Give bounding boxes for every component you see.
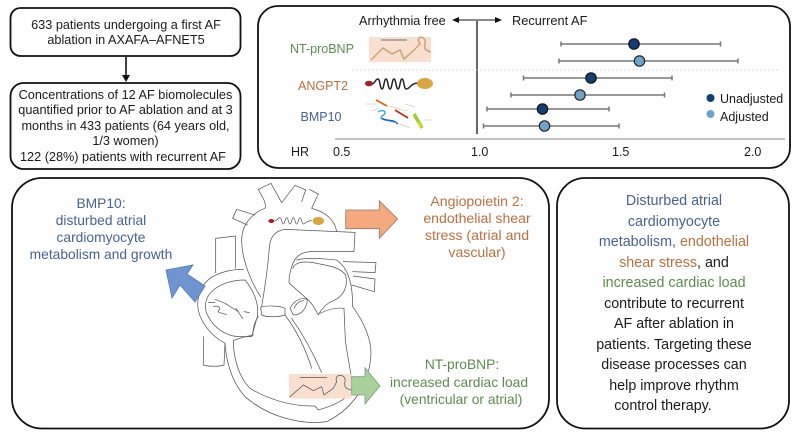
label: NT-proBNP: NT-proBNP xyxy=(290,42,354,56)
axis labels: 2.0 xyxy=(744,145,761,159)
text: BMP10 mechanism: cardiomyocyte xyxy=(57,230,146,245)
text: angiopoietin 2 mechanism: endothelial shear xyxy=(423,210,531,226)
panel: cohort box xyxy=(10,8,240,56)
heading: arrhythmia free: Arrhythmia free xyxy=(359,14,446,28)
text: conclusion: disease processes can xyxy=(601,357,747,373)
text: conclusion: patients. Targeting these xyxy=(596,337,752,353)
forest row: ANGPT2 adjusted xyxy=(511,90,664,100)
panel: biomolecule quantification box: quantified prior to AF ablation and at 3 xyxy=(18,103,233,117)
icon: BMP10 ribbon structure xyxy=(366,100,432,128)
panel: forest plot xyxy=(258,6,790,168)
label: BMP10: BMP10 xyxy=(300,110,342,124)
forest row: BMP10 adjusted xyxy=(484,121,619,131)
axis line xyxy=(335,138,785,140)
text: BMP10 mechanism: disturbed atrial xyxy=(56,213,146,228)
text: NT-proBNP mechanism xyxy=(390,357,528,407)
panel: heart mechanisms xyxy=(12,178,549,428)
axis labels: 1.5 xyxy=(612,145,629,159)
forest row: NT-proBNP adjusted xyxy=(559,56,738,66)
label: ANGPT2: ANGPT2 xyxy=(298,79,348,93)
panel: biomolecule quantification box: 1/3 women) xyxy=(92,134,159,148)
text: angiopoietin 2 mechanism xyxy=(423,193,531,260)
forest row: NT-proBNP unadjusted xyxy=(561,39,720,49)
arrow: double headed direction xyxy=(452,17,502,23)
text: conclusion: Disturbed atrial xyxy=(626,193,722,209)
panel: cohort box: ablation in AXAFA–AFNET5 xyxy=(47,33,205,47)
forest row: BMP10 unadjusted xyxy=(487,104,609,114)
forest row: ANGPT2 unadjusted xyxy=(524,73,672,83)
arrow: cohort to biomolecules xyxy=(122,57,130,82)
text: angiopoietin 2 mechanism: vascular) xyxy=(448,244,506,260)
icon: NT-proBNP peptide xyxy=(369,37,431,62)
text: BMP10 mechanism: metabolism and growth xyxy=(30,247,172,262)
text: BMP10 mechanism xyxy=(30,196,172,262)
text: conclusion: AF after ablation in xyxy=(614,316,734,332)
legend: Unadjusted xyxy=(720,92,783,106)
panel: biomolecule quantification box: 122 (28%) patients with recurrent AF xyxy=(20,150,226,164)
text: conclusion: metabolism, endothelial xyxy=(599,234,749,250)
panel: cohort box: 633 patients undergoing a first AF xyxy=(31,18,221,32)
text: angiopoietin 2 mechanism: Angiopoietin 2: xyxy=(430,193,524,209)
text: conclusion: increased cardiac load xyxy=(602,275,746,291)
text: NT-proBNP mechanism: NT-proBNP: xyxy=(425,357,499,372)
legend: Adjusted xyxy=(720,110,769,124)
text: NT-proBNP mechanism: (ventricular or atrial) xyxy=(400,392,522,407)
text: conclusion: contribute to recurrent xyxy=(604,296,744,312)
panel: biomolecule quantification box xyxy=(10,83,240,169)
text: conclusion: help improve rhythm xyxy=(609,378,739,394)
text: angiopoietin 2 mechanism: stress (atrial and xyxy=(425,227,529,243)
axis labels: 0.5 xyxy=(333,145,350,159)
icon: ANGPT2 molecule on heart xyxy=(268,217,324,225)
icon: NT-proBNP peptide on heart xyxy=(289,374,351,399)
text: BMP10 mechanism: BMP10: xyxy=(76,196,126,211)
panel: biomolecule quantification box: months in 433 patients (64 years old, xyxy=(21,119,230,133)
text: conclusion xyxy=(596,193,752,414)
axis labels xyxy=(291,145,761,159)
axis labels: HR xyxy=(291,145,309,159)
panel: conclusion xyxy=(557,178,789,428)
reference line at HR 1.0 xyxy=(476,21,478,134)
heart diagram xyxy=(198,183,376,422)
arrow: blue to BMP10 text xyxy=(166,265,205,302)
heading: recurrent AF: Recurrent AF xyxy=(512,13,588,28)
text: NT-proBNP mechanism: increased cardiac load xyxy=(390,375,528,390)
panel: biomolecule quantification box: Concentrations of 12 AF biomolecules xyxy=(19,88,232,102)
text: conclusion: cardiomyocyte xyxy=(628,214,720,230)
icon: ANGPT2 molecule xyxy=(365,78,433,89)
text: conclusion: control therapy. xyxy=(614,398,712,414)
text: conclusion: shear stress, and xyxy=(619,255,729,271)
arrow: orange to angiopoietin text xyxy=(346,201,398,238)
icon: BMP10 structure on heart xyxy=(208,299,249,319)
legend xyxy=(706,92,783,124)
axis labels: 1.0 xyxy=(471,145,488,159)
arrow: green to NT-proBNP text xyxy=(352,368,380,404)
